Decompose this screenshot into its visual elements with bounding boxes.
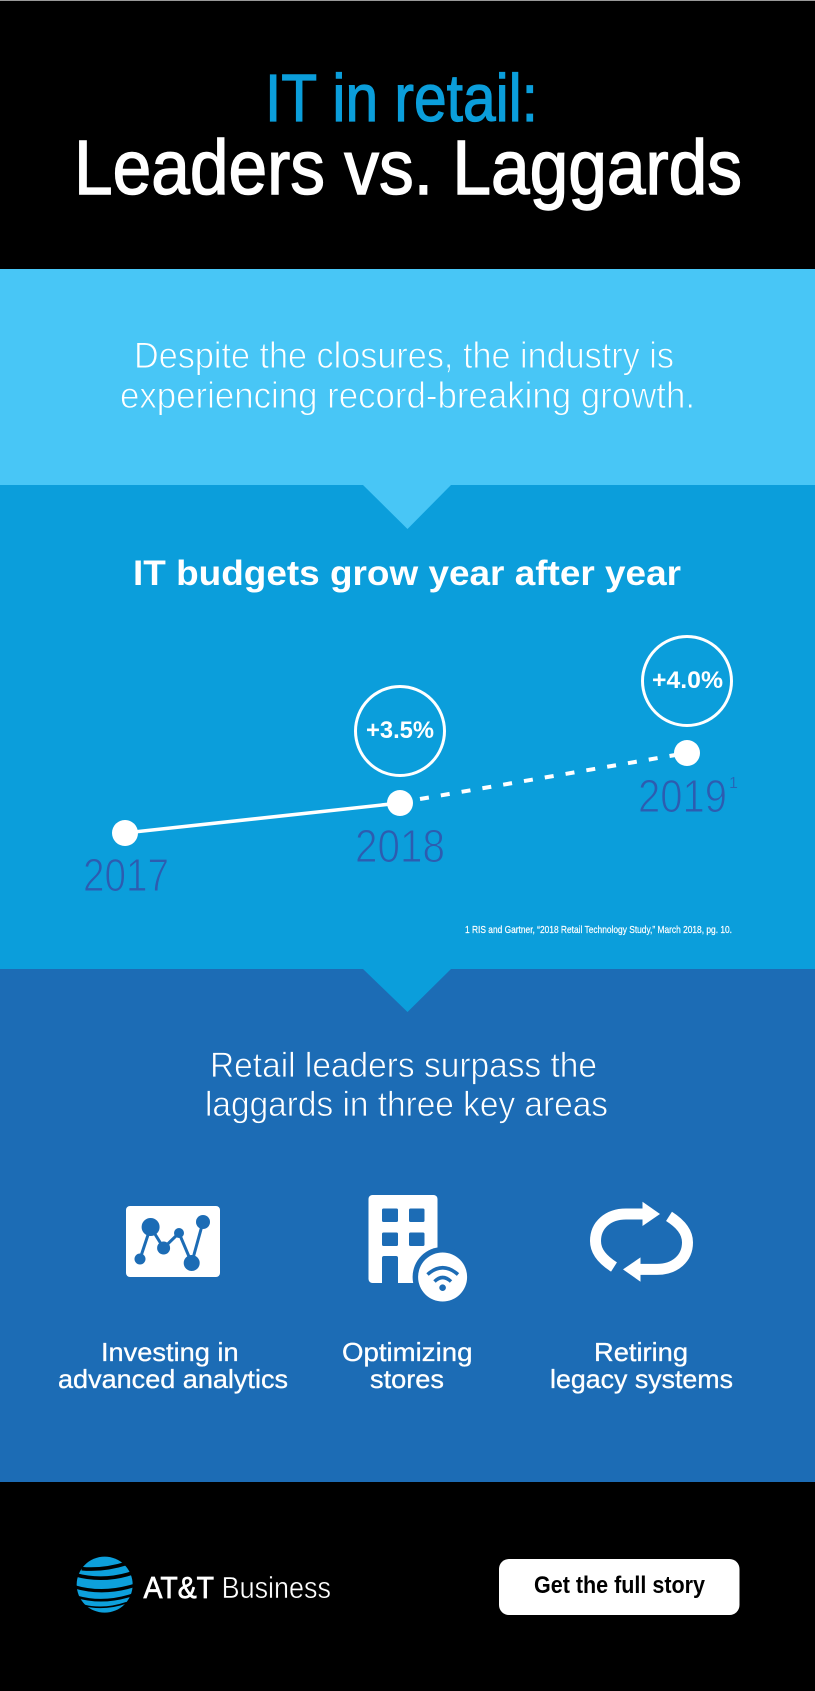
- title line 1: IT in retail:: [265, 61, 538, 136]
- section heading: Retail leaders surpass the: [210, 1046, 597, 1085]
- label: advanced analytics: Investing in: [101, 1337, 239, 1367]
- title line 2: Leaders vs. Laggards: [74, 125, 742, 211]
- point 2018: [387, 790, 413, 816]
- label: optimizing stores: Optimizing: [342, 1337, 472, 1367]
- chart heading: IT budgets grow year after year: [133, 554, 681, 593]
- year labels: 2017: [83, 849, 169, 901]
- icon: AT&T globe: [74, 1557, 135, 1613]
- panel: three key areas: [0, 969, 815, 1482]
- callout +4.0%: [642, 636, 732, 726]
- icon: analytics chart: [126, 1206, 220, 1277]
- line chart: [83, 636, 738, 901]
- intro text: experiencing record-breaking growth.: [120, 375, 695, 416]
- label: retiring legacy systems: legacy systems: [550, 1364, 733, 1394]
- panel: IT budgets chart: [0, 485, 815, 969]
- dashed line 2018 to 2019: [420, 753, 687, 799]
- year labels: 2018: [355, 820, 445, 872]
- panel: footer: [0, 1482, 815, 1691]
- pointer triangle: [363, 485, 451, 529]
- icon: store with wifi: [368, 1195, 473, 1307]
- intro text: [120, 335, 695, 416]
- label: advanced analytics: [58, 1337, 288, 1394]
- label: optimizing stores: [342, 1337, 472, 1394]
- callout +4.0%: +4.0%: [652, 667, 723, 694]
- point 2019: [674, 740, 700, 766]
- panel: intro statement: [0, 269, 815, 485]
- solid line 2017 to 2018: [125, 803, 400, 833]
- logo: AT&T Business: Business: [222, 1570, 331, 1605]
- icon: retiring systems cycle arrows: [596, 1202, 688, 1282]
- year labels: [83, 770, 738, 901]
- intro text: Despite the closures, the industry is: [134, 335, 674, 376]
- callout +3.5%: +3.5%: [366, 717, 434, 744]
- year labels: 1: [729, 775, 738, 792]
- button: get the full story: Get the full story: [534, 1572, 706, 1599]
- label: retiring legacy systems: Retiring: [594, 1337, 688, 1367]
- logo wordmark: AT&T: [144, 1570, 214, 1605]
- panel: title header: [0, 0, 815, 269]
- point 2017: [112, 820, 138, 846]
- label: optimizing stores: stores: [370, 1364, 444, 1394]
- pointer triangle: [363, 969, 451, 1012]
- footnote: 1 RIS and Gartner, “2018 Retail Technology Study,” March 2018, pg. 10.: [465, 924, 732, 936]
- button: get the full story: [499, 1559, 740, 1615]
- section heading: laggards in three key areas: [205, 1085, 608, 1124]
- label: retiring legacy systems: [550, 1337, 733, 1394]
- label: advanced analytics: advanced analytics: [58, 1364, 288, 1394]
- callout +3.5%: [356, 686, 444, 776]
- year labels: 2019: [638, 770, 727, 822]
- section heading: [205, 1046, 608, 1124]
- logo: AT&T Business: [74, 1557, 331, 1613]
